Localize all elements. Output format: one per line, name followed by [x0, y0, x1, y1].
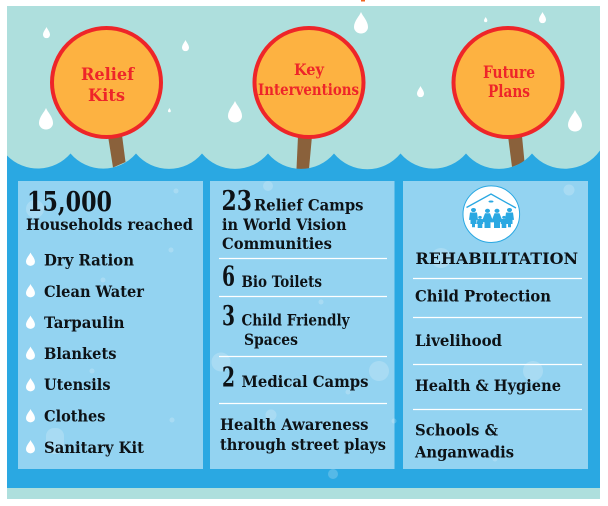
- stat: 3 child friendly spaces: [222, 301, 350, 349]
- text: health awareness: Health Awareness: [220, 415, 369, 434]
- stat: 2 medical camps: 2: [222, 362, 235, 394]
- list of relief kit items: [26, 250, 145, 457]
- item: health and hygiene: Health & Hygiene: [415, 376, 561, 395]
- list of relief kit items: Clothes: [44, 406, 106, 426]
- sign: Relief Kits: Relief: [81, 65, 136, 85]
- water bubbles: [26, 188, 178, 454]
- text: health awareness: [220, 415, 386, 454]
- headline: households reached: 15,000: [27, 187, 112, 218]
- stat: 2 medical camps: Medical Camps: [242, 372, 369, 391]
- list of relief kit items: Tarpaulin: [44, 313, 124, 332]
- panel: rehabilitation: [403, 181, 588, 469]
- stat: 6 bio toilets: [222, 262, 322, 292]
- panel: relief kits: [18, 181, 203, 469]
- list of relief kit items: Clean Water: [44, 282, 145, 301]
- list of relief kit items: Dry Ration: [44, 250, 134, 270]
- stat: 23 relief camps: 23: [222, 186, 252, 217]
- water bubbles: [431, 184, 574, 462]
- item: schools and anganwadis: Anganwadis: [414, 442, 514, 462]
- sign: Relief Kits: [52, 28, 161, 168]
- stat: 3 child friendly spaces: Spaces: [244, 330, 298, 349]
- falling rain drops: [39, 12, 582, 132]
- stat: 23 relief camps: Relief Camps: [254, 196, 364, 214]
- item: schools and anganwadis: [414, 420, 514, 462]
- headline: households reached: Households reached: [26, 215, 193, 234]
- stat: 6 bio toilets: 6: [222, 262, 235, 292]
- sign: Key Interventions: Key: [294, 60, 325, 79]
- stat: 23 relief camps: [222, 186, 364, 253]
- headline: households reached: [26, 187, 193, 234]
- list of relief kit items: Blankets: [44, 344, 117, 363]
- item: child protection: Child Protection: [415, 286, 551, 306]
- sign: Key Interventions: Interventions: [258, 80, 359, 99]
- sign: Future Plans: Plans: [488, 82, 530, 101]
- heading: rehabilitation: REHABILITATION: [416, 249, 578, 268]
- list of relief kit items: Sanitary Kit: [44, 438, 145, 457]
- item: livelihood: Livelihood: [415, 331, 502, 350]
- text: health awareness: through street plays: [220, 435, 386, 454]
- sign: Future Plans: Future: [483, 63, 535, 82]
- stat: 3 child friendly spaces: 3: [222, 301, 235, 332]
- sign: Relief Kits: Kits: [88, 86, 125, 106]
- top edge orange mark: [361, 0, 365, 2]
- stat: 2 medical camps: [222, 362, 369, 394]
- stat: 23 relief camps: Communities: [222, 234, 332, 253]
- stat: 6 bio toilets: Bio Toilets: [242, 272, 322, 291]
- list of relief kit items: Utensils: [44, 375, 111, 394]
- sign: Future Plans: [454, 28, 562, 167]
- stat: 23 relief camps: in World Vision: [222, 215, 346, 234]
- flood water with wavy top: [7, 150, 600, 488]
- stat: 3 child friendly spaces: Child Friendly: [242, 310, 350, 330]
- panel: key interventions: [210, 181, 396, 479]
- water bubbles: [212, 181, 396, 479]
- item: schools and anganwadis: Schools &: [415, 420, 499, 440]
- icon: family under roof: [463, 186, 520, 242]
- sign: Key Interventions: [254, 28, 364, 169]
